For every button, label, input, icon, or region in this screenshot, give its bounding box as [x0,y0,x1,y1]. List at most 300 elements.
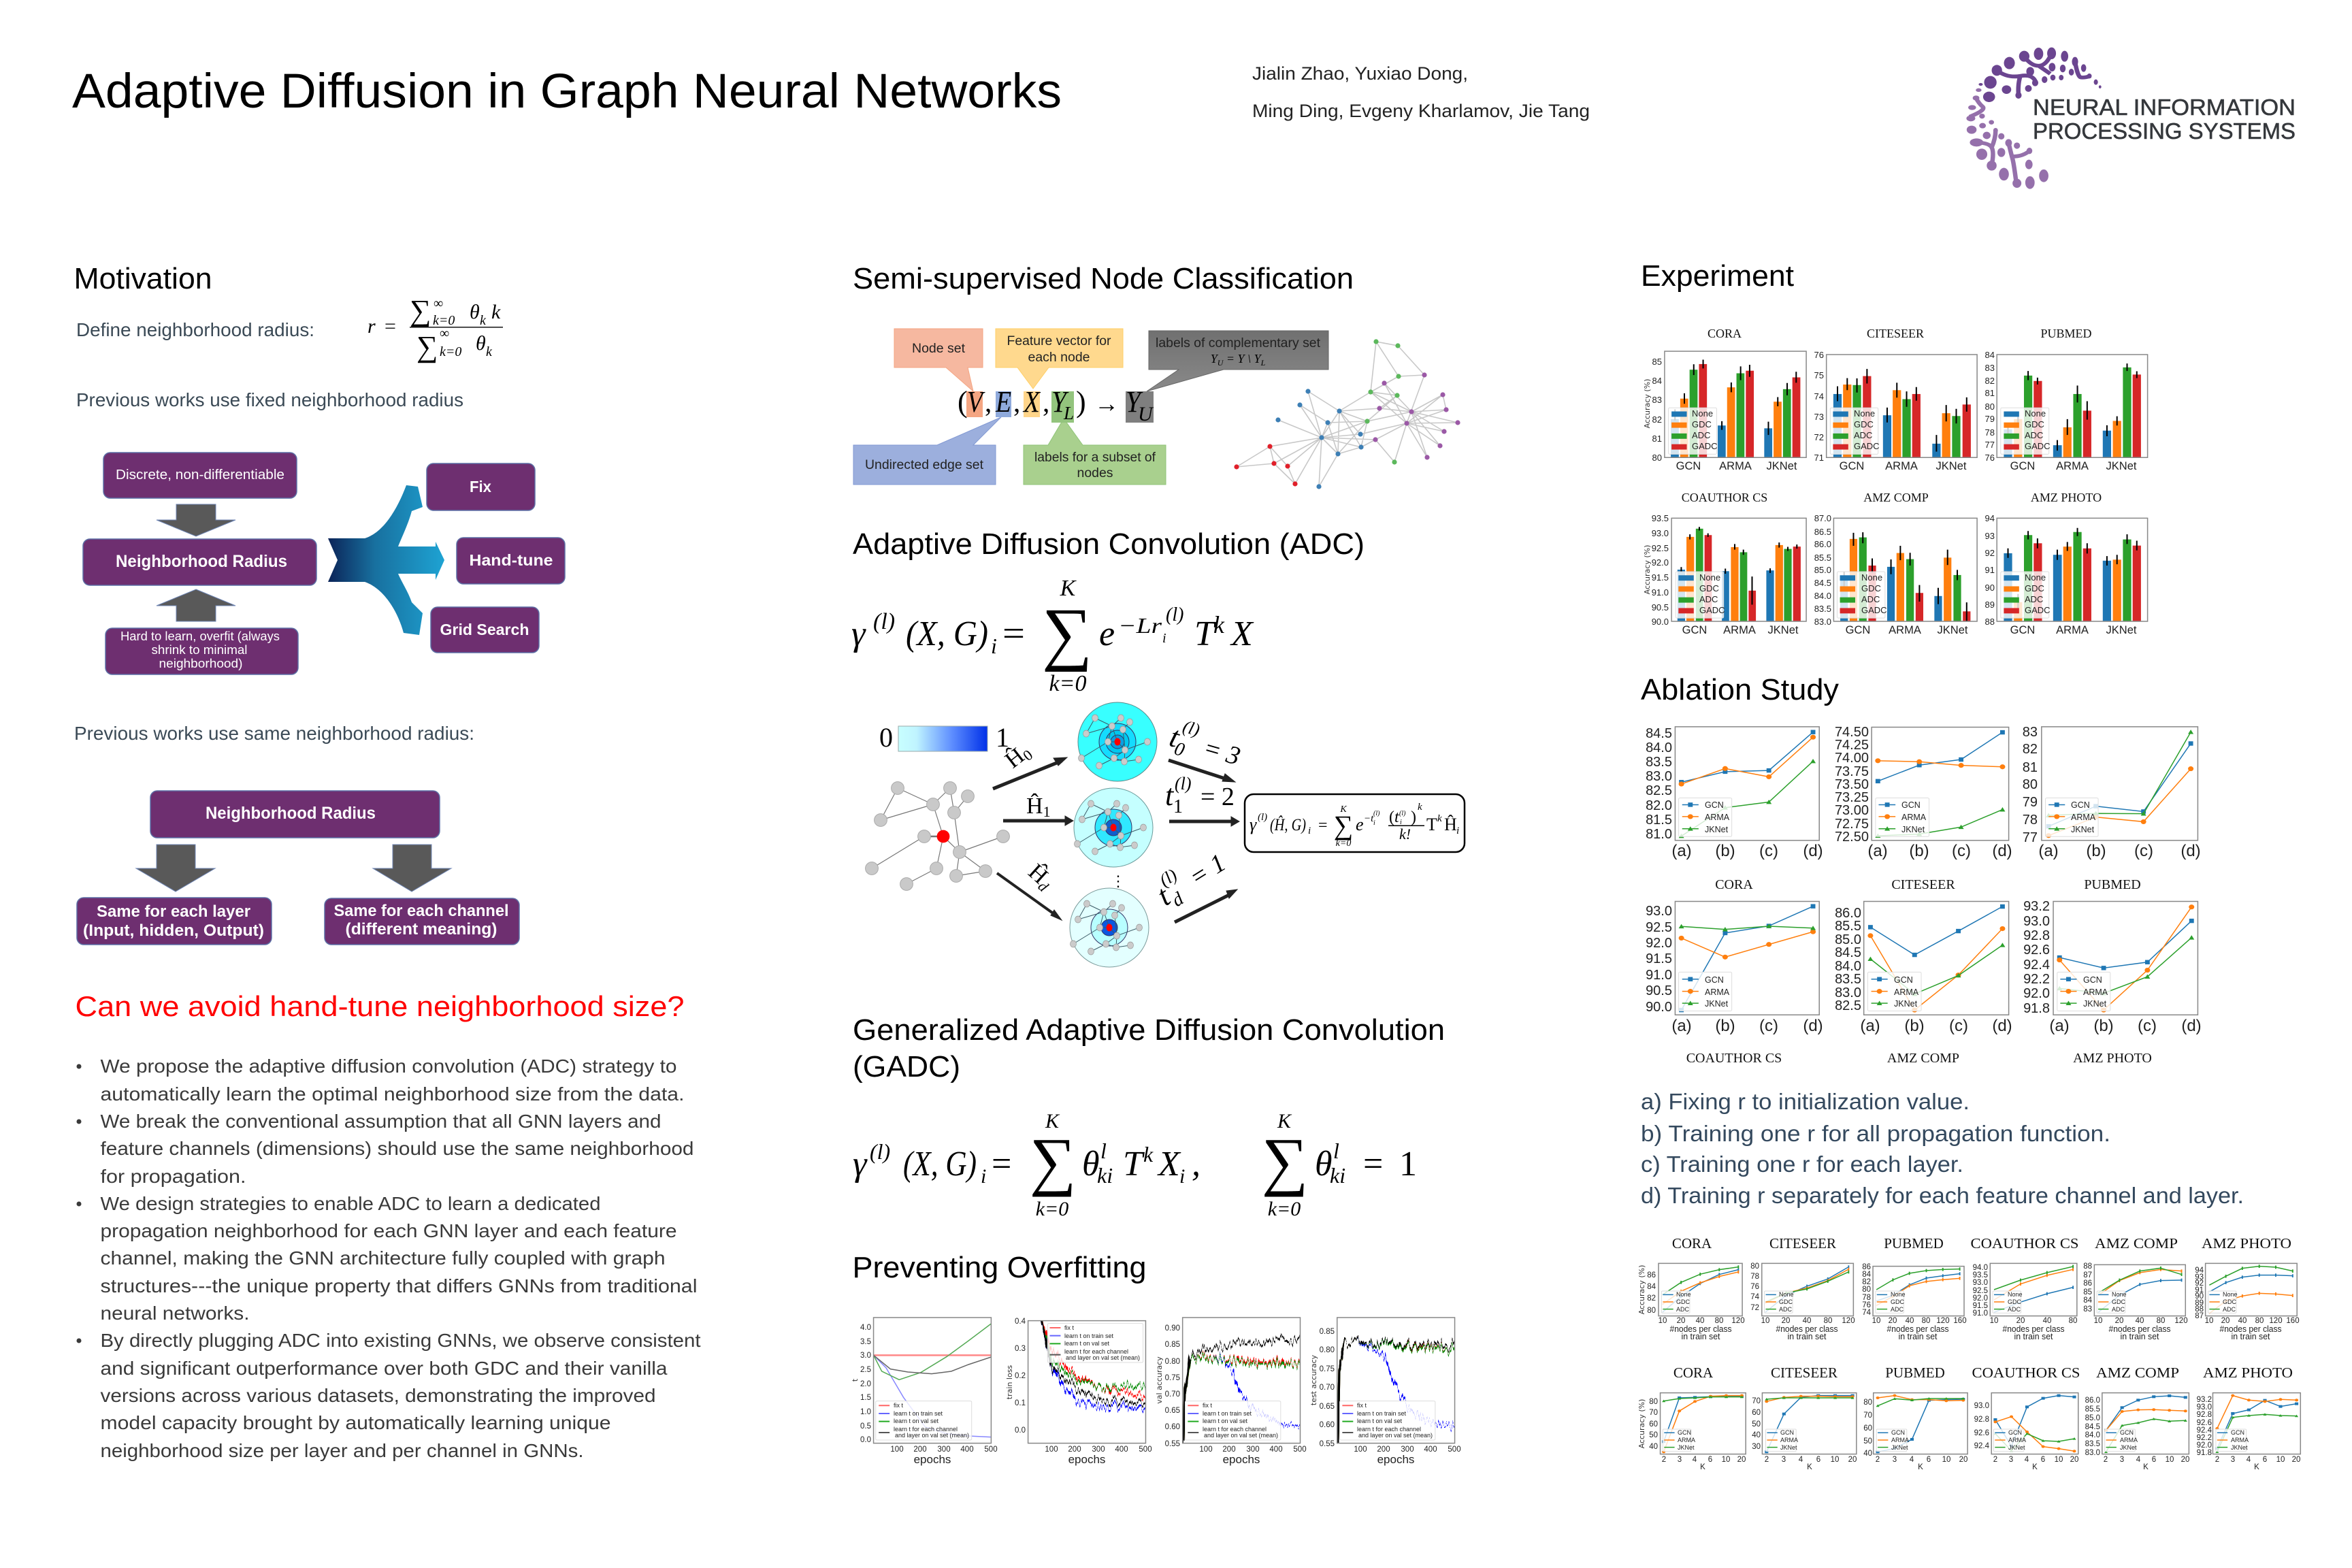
legends: gcn arma jknet: GCN [1678,1429,1691,1436]
formula: task definition: , [1013,387,1020,418]
tick labels: K charts: 92.8 [1974,1416,1989,1424]
box: hard to learn: neighborhood) [159,657,242,670]
tick labels: nodes per class charts: 84 [1862,1271,1872,1279]
icon: channel 0 neighborhood [1078,702,1157,781]
box: output formula: = [1318,817,1328,834]
authors: Jialin Zhao, Yuxiao Dong, [1252,63,1468,84]
bar chart: CITESEER: 74 [1814,391,1824,402]
line chart: AMZ PHOTO ablation: GCN [2083,975,2102,985]
line chart: COAUTHOR CS ablation: 91.0 [1646,968,1672,983]
line chart: PUBMED ablation: 80 [2023,777,2038,792]
tick labels: K charts: K [2032,1463,2038,1471]
bar chart: AMZ PHOTO: 92 [1985,548,1995,558]
line chart: PUBMED ablation: (d) [2180,842,2201,860]
bar chart: CORA: GDC [1692,419,1712,429]
tick labels: nodes per class charts: 10 [1659,1317,1667,1325]
bar chart: AMZ PHOTO: 93 [1985,531,1995,541]
tick labels: K charts: 40 [1863,1450,1872,1458]
bar chart: AMZ COMP: 84.5 [1814,578,1831,588]
tick labels: nodes per class charts: 120 [2269,1317,2283,1325]
tick labels: K charts: 6 [2152,1456,2156,1464]
text: bullet list: model capacity brought by automatically learning unique [101,1412,611,1433]
formula: neighborhood radius: θ [470,301,480,323]
bar chart: COAUTHOR CS: GADC [1699,605,1725,615]
tick labels: nodes per class charts: 86 [1862,1263,1871,1271]
formula: task definition: , [1043,387,1049,418]
tick labels: K charts: K [2254,1463,2259,1471]
tick labels: K charts: 50 [1863,1437,1872,1446]
line chart: PUBMED ablation: (a) [2038,842,2059,860]
legends: gcn arma jknet: JKNet [1780,1444,1797,1451]
tick labels: nodes per class charts: in train set [2014,1332,2053,1341]
line chart: train loss: fix t [1064,1324,1075,1331]
legends: none gdc adc: ADC [2112,1306,2125,1313]
tick labels: nodes per class charts: 40 [1803,1317,1811,1325]
tick labels: K charts: 4 [2136,1456,2141,1464]
heading: GADC: (GADC) [853,1050,960,1083]
line chart: AMZ COMP ablation: ARMA [1894,987,1919,997]
line chart: t vs epochs: 0.0 [860,1436,871,1444]
chart titles row 2: COAUTHOR CS [1972,1365,2080,1381]
line chart: train loss: train loss [1005,1365,1014,1399]
legends: none gdc adc: GDC [1779,1298,1793,1305]
tick labels: nodes per class charts [1647,1262,2300,1341]
formula: GADC: K [1277,1110,1292,1132]
line charts: accuracy vs K [1661,1393,2300,1454]
diagram: fixed radius flow [83,453,565,674]
line chart: CORA ablation [1646,726,1823,892]
legends: none gdc adc: ADC [1891,1306,1904,1313]
line chart: t vs epochs: 100 [890,1446,904,1454]
tick labels: K charts: 2 [1993,1456,1997,1464]
legends: none gdc adc: GDC [2223,1298,2236,1305]
panel: semi-supervised node classification [853,262,1460,489]
legends: gcn arma jknet: JKNet [1678,1444,1695,1451]
legends: gcn arma jknet: ARMA [1891,1437,1909,1443]
formula: GADC: l [1333,1139,1339,1163]
line chart: val accuracy: 0.75 [1165,1374,1180,1382]
tick labels: K charts: 10 [1722,1456,1730,1464]
tick labels: nodes per class charts: 82 [1862,1278,1871,1286]
tick labels: K charts: 91.8 [2197,1449,2212,1457]
line chart: AMZ PHOTO ablation: (b) [2093,1017,2114,1035]
tick labels: K charts: 2 [1876,1456,1880,1464]
line chart: train loss: 0.2 [1015,1372,1026,1380]
tick labels: K charts: 10 [2276,1456,2285,1464]
line chart: val accuracy: 300 [1246,1446,1260,1454]
line chart: PUBMED ablation: 82 [2023,742,2038,757]
icon: channel d neighborhood [1070,888,1149,967]
labels: H hat: Ĥ [1026,794,1043,819]
text: ablation settings list: a) Fixing r to initialization value. [1641,1089,1970,1114]
legends: gcn arma jknet: JKNet [2231,1444,2248,1451]
tick labels: nodes per class charts: 20 [1677,1317,1685,1325]
bar chart: COAUTHOR CS [1643,491,1806,636]
line chart: AMZ COMP ablation [1835,902,2012,1066]
legends: none gdc adc: ADC [1676,1306,1690,1313]
tick labels: nodes per class charts: 120 [1731,1317,1745,1325]
text: bullet list: and significant outperformance over both GDC and their vanilla [101,1358,668,1379]
bar chart: AMZ COMP: ARMA [1889,624,1921,636]
box: output formula: (l) [1373,810,1380,817]
formula: neighborhood radius: k [491,301,501,323]
logo: neural information processing systems: NEURAL INFORMATION [2033,95,2296,120]
callout: feature vector: each node [1028,350,1090,365]
line chart: CITESEER ablation: 72.50 [1835,830,1869,845]
tick labels: K charts: 84.5 [2085,1423,2100,1431]
formula: neighborhood radius: k=0 [433,313,455,328]
box: discrete: Discrete, non-differentiable [116,468,284,483]
box: neighborhood radius top [150,791,440,838]
bar chart: AMZ COMP: 83.5 [1814,604,1831,614]
bar chart: CITESEER: GADC [1854,441,1880,451]
box: neighborhood radius: Neighborhood Radius [116,552,287,571]
bar chart: COAUTHOR CS: 90.5 [1652,602,1669,612]
box: same for each channel: (different meaning) [346,920,497,938]
box: neighborhood radius top: Neighborhood Radius [206,804,376,823]
line chart: t vs epochs: 300 [937,1446,951,1454]
bar chart: PUBMED: GCN [2010,460,2035,472]
formula: ADC: ∑ [1042,594,1092,672]
bar chart: CITESEER: 75 [1814,370,1824,380]
legends: gcn arma jknet: JKNet [2120,1444,2137,1451]
tick labels: K charts: 93.0 [2197,1403,2212,1411]
line chart: AMZ COMP ablation: 82.5 [1835,998,1861,1013]
heading: GADC: Generalized Adaptive Diffusion Convolution [853,1013,1445,1047]
line chart: CORA ablation: ARMA [1705,813,1730,822]
line chart: train loss: 500 [1139,1446,1152,1454]
tick labels: K charts: 20 [2292,1456,2300,1464]
graph: colored node network [1234,339,1460,489]
line chart: AMZ PHOTO ablation: (d) [2181,1017,2202,1035]
tick labels: nodes per class charts: #nodes per class [2108,1324,2171,1334]
tick labels: K charts: 40 [1649,1443,1658,1451]
callout: feature vector [996,329,1123,389]
line chart: CITESEER ablation: (a) [1867,842,1888,860]
panel: accuracy vs K charts [1637,1365,2300,1471]
tick labels: nodes per class charts: 92.5 [1973,1287,1988,1295]
line chart: AMZ COMP ablation: (a) [1860,1017,1880,1035]
line chart: test accuracy: 0.80 [1320,1346,1335,1354]
tick labels: nodes per class charts: 88 [2083,1262,2092,1271]
line chart: COAUTHOR CS ablation: COAUTHOR CS [1686,1051,1782,1066]
tick labels: K charts: 10 [2055,1456,2063,1464]
formula: ADC: i [991,634,997,658]
text: bullet list: for propagation. [101,1166,246,1187]
tick labels: nodes per class charts: 87 [2083,1271,2092,1279]
formula: task definition: V [967,385,985,419]
tick labels: nodes per class charts: 80 [1750,1262,1759,1271]
line chart: t vs epochs: 200 [913,1446,927,1454]
legends: gcn arma jknet: GCN [1780,1429,1794,1436]
box: same for each channel [325,898,519,945]
bar chart: CORA: ADC [1692,430,1710,440]
tick labels: K charts: 4 [1799,1456,1803,1464]
line chart: val accuracy: epochs [1223,1453,1260,1466]
bar chart: COAUTHOR CS: COAUTHOR CS [1682,491,1767,504]
line chart: t vs epochs: 1.5 [860,1394,871,1402]
tick labels: nodes per class charts: in train set [2121,1332,2159,1341]
chart titles row: AMZ COMP [2095,1235,2178,1252]
formula: GADC [853,1110,1417,1220]
box: hand-tune: Hand-tune [470,551,553,569]
tick labels: nodes per class charts: 92.0 [1973,1294,1988,1303]
line chart: COAUTHOR CS ablation: ARMA [1705,987,1730,997]
line chart: AMZ PHOTO ablation: ARMA [2083,987,2108,997]
formula: GADC: X [1157,1145,1181,1183]
formula: task definition: ( [958,385,968,419]
line chart: train loss: 300 [1092,1446,1105,1454]
bar chart: AMZ PHOTO: 90 [1985,583,1995,593]
formula: GADC: ∑ [1030,1124,1076,1197]
tick labels: K charts [1649,1396,2300,1471]
line chart: test accuracy: 300 [1401,1446,1414,1454]
tick labels: nodes per class charts: in train set [1787,1332,1827,1341]
panel: experiment [1641,259,2148,636]
tick labels: K charts: 3 [2009,1456,2013,1464]
formula: ADC: e [1099,615,1115,653]
legends: none gdc adc: None [1779,1291,1794,1298]
line chart: AMZ COMP ablation: (c) [1949,1017,1968,1035]
line chart: CITESEER ablation: (d) [1992,842,2012,860]
callout: complementary labels: L [1260,358,1266,368]
line chart: t vs epochs: learn t for each channel [894,1426,958,1433]
tick labels: K charts: 10 [2166,1456,2174,1464]
bar chart: CITESEER: 73 [1814,412,1824,422]
box: output formula: i [1456,826,1459,836]
bar chart: CITESEER: 71 [1814,453,1824,463]
box: same for each channel: Same for each channel [333,902,509,920]
line charts: accuracy vs nodes [1659,1263,2297,1316]
line chart: CORA ablation: 81.5 [1646,813,1672,828]
bar chart: AMZ PHOTO: 94 [1985,513,1995,523]
line chart: AMZ PHOTO ablation [2023,899,2202,1066]
line chart: t vs epochs: and layer on val set (mean) [895,1432,969,1439]
formula: GADC: θ [1315,1145,1333,1183]
tick labels: nodes per class charts: 120 [1842,1317,1855,1325]
arrow: branching [328,485,444,635]
bar chart: PUBMED [1985,327,2148,472]
arrow: up [157,589,235,621]
line chart: val accuracy: learn t for each channel [1203,1426,1267,1433]
text: ablation settings list: c) Training one r for each layer. [1641,1152,1963,1177]
bar chart: PUBMED: ARMA [2056,460,2089,472]
tick labels: nodes per class charts: 80 [2069,1317,2077,1325]
bar chart: AMZ PHOTO: ADC [2025,594,2043,604]
labels: t values: = 2 [1200,783,1235,811]
line chart: AMZ COMP ablation: (b) [1904,1017,1925,1035]
box: same for each layer [77,898,272,945]
text: bullet list: channel, making the GNN architecture fully coupled with graph [101,1247,666,1269]
formula: task definition: Y [1051,385,1069,419]
box: output formula: −t [1364,813,1374,824]
tick labels: K charts: 4 [2247,1456,2251,1464]
heading: ADC: Adaptive Diffusion Convolution (ADC) [853,527,1365,561]
legends: gcn arma jknet [1678,1429,2249,1451]
tick labels: nodes per class charts: 82 [1647,1294,1656,1303]
tick labels: nodes per class charts: 90 [2195,1292,2204,1301]
tick labels: nodes per class charts: 91.0 [1973,1309,1988,1318]
line chart: PUBMED ablation: GCN [2071,800,2090,810]
line chart: t vs epochs: learn t on val set [894,1418,939,1424]
line chart: test accuracy: 200 [1377,1446,1390,1454]
box: output formula: k [1418,802,1422,813]
line chart: val accuracy [1155,1318,1307,1466]
chart titles row 2: PUBMED [1885,1365,1945,1381]
formula: GADC: T [1123,1145,1145,1183]
box: same for each layer: (Input, hidden, Output) [83,921,264,940]
box: grid search: Grid Search [440,621,529,638]
legends: none gdc adc: None [2008,1291,2023,1298]
bar chart: CITESEER: ADC [1854,430,1872,440]
line chart: CORA ablation: 83.5 [1646,755,1672,770]
formula: GADC: i [981,1165,986,1188]
heading: GADC [853,1013,1445,1083]
bar chart: PUBMED: PUBMED [2040,327,2092,340]
line chart: COAUTHOR CS ablation: 93.0 [1646,904,1672,919]
line chart: COAUTHOR CS ablation: 91.5 [1646,951,1672,966]
tick labels: K charts: 85.0 [2085,1414,2100,1422]
line chart: AMZ COMP ablation: 86.0 [1835,906,1861,921]
box: hard to learn: Hard to learn, overfit (always [120,630,280,643]
line chart: CORA ablation: 84.5 [1646,726,1672,741]
callout: labels for subset: labels for a subset of [1034,451,1156,465]
box: output formula: ∑ [1334,810,1353,840]
line chart: AMZ PHOTO ablation: 93.0 [2023,914,2050,929]
box: output formula: (l) [1399,810,1406,817]
bar chart: PUBMED: 76 [1985,453,1995,463]
bar chart: AMZ PHOTO: GADC [2025,605,2051,615]
line chart: val accuracy: 0.85 [1165,1341,1180,1349]
line chart: PUBMED ablation: JKNet [2071,825,2095,834]
bar chart: COAUTHOR CS: 92.5 [1652,543,1669,553]
tick labels: nodes per class charts: 160 [1953,1317,1967,1325]
labels: t values: 0 [1172,738,1187,761]
bar chart: PUBMED: 77 [1985,440,1995,450]
tick labels: nodes per class charts: 94 [2195,1267,2204,1275]
legends: none gdc adc: GDC [1676,1298,1690,1305]
line chart: COAUTHOR CS ablation: (a) [1671,1017,1692,1035]
line chart: val accuracy: 0.80 [1165,1358,1180,1366]
box: output formula: k! [1399,826,1411,843]
line chart: CORA ablation: (d) [1803,842,1823,860]
box: output formula: k=0 [1336,838,1351,849]
tick labels: nodes per class charts: 76 [1862,1301,1871,1309]
tick labels: K charts: 2 [1765,1456,1769,1464]
tick labels: nodes per class charts: in train set [1899,1332,1938,1341]
bar chart: PUBMED: 80 [1985,402,1995,412]
bar chart: AMZ PHOTO: AMZ PHOTO [2031,491,2102,504]
callout: undirected edge set [853,417,1001,485]
tick labels: K charts: 20 [1848,1456,1857,1464]
line chart: AMZ PHOTO ablation: 91.8 [2023,1001,2050,1016]
formula: ADC: (X, G) [906,615,988,653]
line chart: AMZ COMP ablation: AMZ COMP [1887,1051,1959,1066]
tick labels: K charts: K [2143,1463,2149,1471]
line chart: COAUTHOR CS ablation: 90.5 [1646,983,1672,998]
bar chart: COAUTHOR CS: 92.0 [1652,557,1669,568]
tick labels: nodes per class charts: 91.5 [1973,1302,1988,1310]
legends: none gdc adc: ADC [2223,1306,2236,1313]
line chart: CORA ablation: (a) [1671,842,1692,860]
arrows: channels to output [1169,760,1239,922]
box: hard to learn [105,628,298,674]
bar chart: PUBMED: 84 [1985,350,1995,360]
tick labels: nodes per class charts: 74 [1862,1309,1872,1317]
legends: gcn arma jknet: GCN [2231,1429,2244,1436]
bar chart: COAUTHOR CS: 93.5 [1652,513,1669,523]
line chart: val accuracy: 400 [1269,1446,1283,1454]
tick labels: nodes per class charts: 160 [2286,1317,2300,1325]
title: Adaptive Diffusion in Graph Neural Networks [72,65,1062,118]
labels: t values: (l) [1181,717,1202,740]
line chart: COAUTHOR CS ablation: GCN [1705,975,1724,985]
tick labels: nodes per class charts: 80 [2157,1317,2165,1325]
tick labels: K charts: 93.0 [1974,1402,1989,1410]
legends: gcn arma jknet: GCN [2120,1429,2134,1436]
box: output formula: i [1400,819,1402,826]
line chart: train loss: and layer on val set (mean) [1066,1354,1140,1361]
tick labels: K charts: 84.0 [2085,1431,2100,1439]
line chart: val accuracy: learn t on val set [1203,1418,1248,1424]
line chart: t vs epochs: 3.5 [860,1338,871,1346]
box: hand-tune [457,538,565,584]
chart titles row: AMZ PHOTO [2202,1235,2291,1252]
line chart: val accuracy: 200 [1222,1446,1236,1454]
line chart: AMZ PHOTO ablation: (a) [2049,1017,2070,1035]
formula: ADC: (l) [873,609,895,634]
line chart: COAUTHOR CS ablation: 92.5 [1646,920,1672,935]
callout: labels for subset: nodes [1077,466,1113,480]
line chart: t vs epochs: 3.0 [860,1352,871,1360]
line chart: AMZ COMP ablation: 83.0 [1835,985,1861,1000]
line chart: test accuracy: and layer on val set (mean) [1358,1432,1433,1439]
tick labels: K charts: 4 [1693,1456,1697,1464]
line chart: CORA ablation: 81.0 [1646,827,1672,842]
tick labels: nodes per class charts: 92 [2195,1279,2204,1288]
bar chart: COAUTHOR CS: GCN [1682,624,1707,636]
authors [1252,63,1590,121]
text: bullet list: We propose the adaptive diffusion convolution (ADC) strategy to [101,1056,676,1077]
box: output formula: (l) [1258,812,1267,823]
bar chart: AMZ COMP: JKNet [1938,624,1968,636]
bar chart: CORA: GCN [1676,460,1701,472]
callout: feature vector: Feature vector for [1007,334,1111,348]
labels: t values: t [1166,720,1184,754]
callout: complementary labels: labels of complementary set [1156,336,1321,350]
text: bullet list: By directly plugging ADC into existing GNNs, we observe consistent [101,1330,701,1351]
tick labels: K charts: 2 [2215,1456,2219,1464]
formula: task definition: ) [1076,385,1086,419]
tick labels: K charts: 10 [1942,1456,1950,1464]
legends: gcn arma jknet: ARMA [2008,1437,2026,1443]
tick labels: K charts: 92.2 [2197,1434,2212,1442]
line chart: PUBMED ablation: 77 [2023,830,2038,845]
authors: Ming Ding, Evgeny Kharlamov, Jie Tang [1252,101,1590,121]
line chart: AMZ COMP ablation: JKNet [1894,999,1918,1009]
callout: labels for subset [1024,419,1166,485]
line chart: AMZ COMP ablation: 85.0 [1835,932,1861,947]
heading: preventing overfitting: Preventing Overfitting [852,1251,1146,1284]
formula: task definition: → [1094,390,1119,417]
tick labels: K charts: 4 [2025,1456,2029,1464]
formula: neighborhood radius [368,294,503,363]
formula: ADC: (l) [1166,604,1183,625]
box: output formula: i [1373,819,1375,827]
formula: GADC: K [1045,1110,1060,1132]
line chart: train loss: 200 [1068,1446,1081,1454]
line chart: CITESEER ablation: (c) [1952,842,1971,860]
